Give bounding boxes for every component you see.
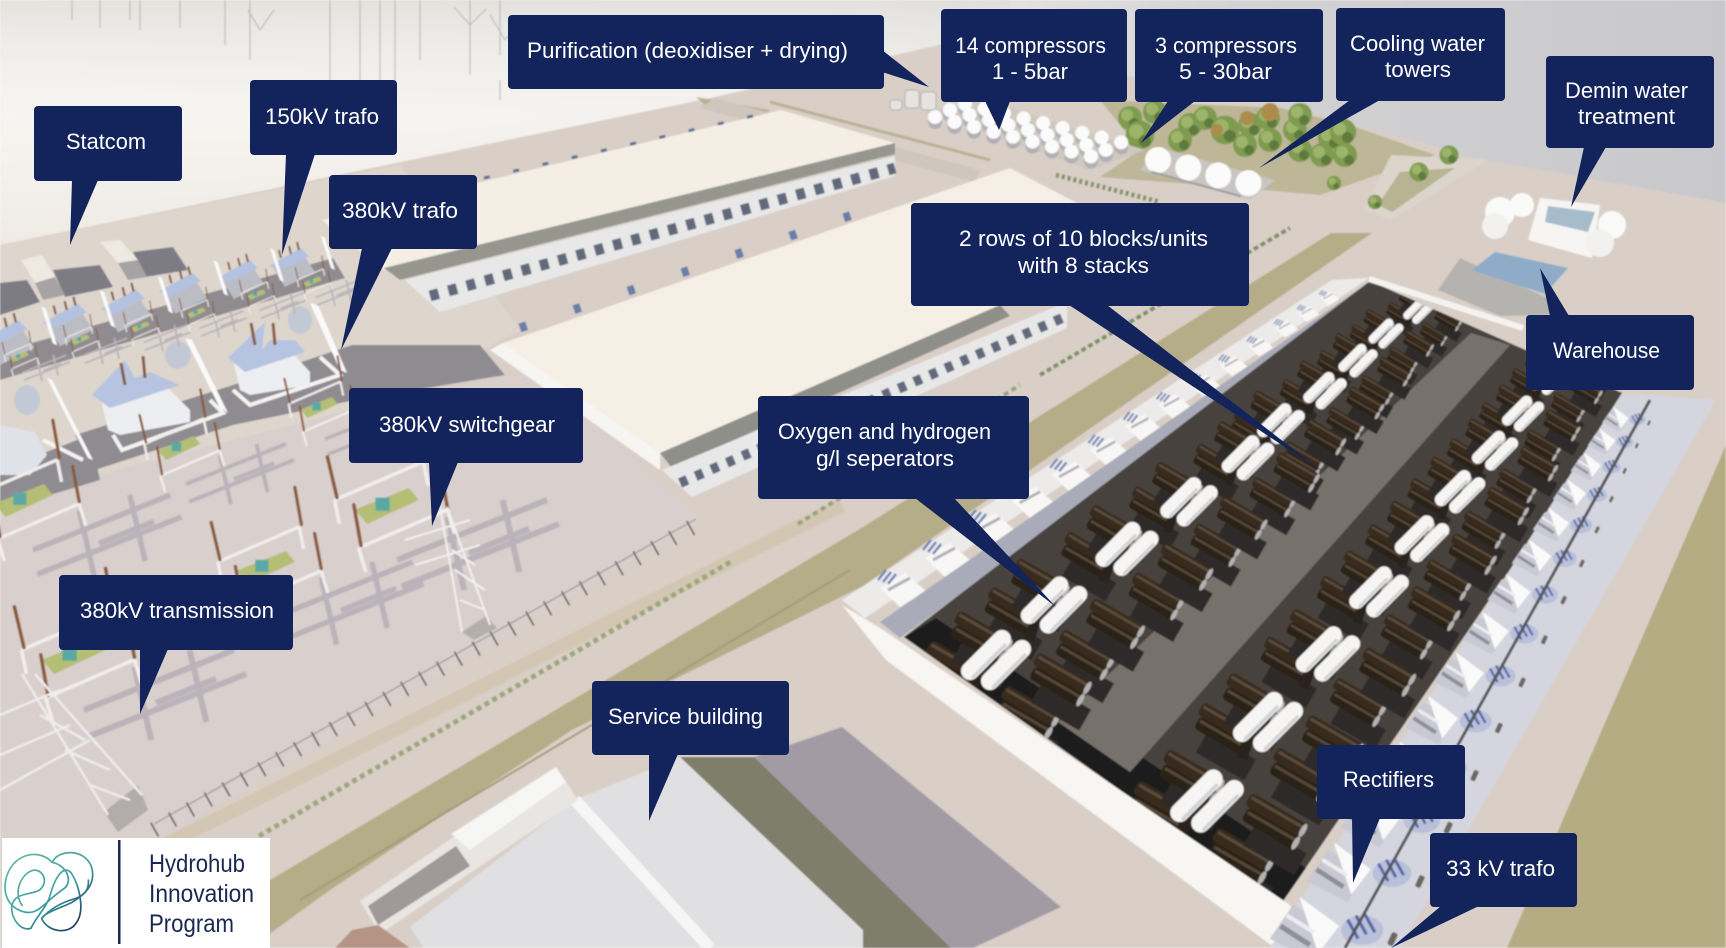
- statcom units: [0, 240, 188, 315]
- 380 kV transformer (right): [228, 303, 347, 405]
- switchgear bays with shadows: [0, 256, 559, 740]
- logo wordmark: Hydrohub: [149, 850, 245, 878]
- logo wordmark: [149, 850, 254, 938]
- callout: 14 compressors: 1 - 5bar: [992, 59, 1068, 84]
- callout: Demin water treatment: Demin water: [1565, 78, 1688, 103]
- callout: 150kV trafo: [250, 80, 397, 255]
- logo wordmark: Program: [149, 910, 234, 938]
- substation shadows: [0, 258, 505, 510]
- compressors: 14 units and 3 units: [926, 100, 1145, 170]
- olive diagonal strip: [250, 233, 1372, 948]
- callout: 2 rows of 10 blocks/units with 8 stacks: [911, 203, 1320, 470]
- ground: light zone around statcom and transformers: [0, 165, 520, 510]
- callout: 380kV transmission: 380kV transmission: [80, 598, 274, 623]
- callout: 14 compressors: 14 compressors: [955, 33, 1106, 58]
- callout: Service building: Service building: [608, 704, 763, 729]
- callout: Rectifiers: Rectifiers: [1343, 767, 1434, 792]
- ground: substation field: [0, 370, 700, 850]
- callout: 2 rows of 10 blocks/units with 8 stacks: 2 rows of 10 blocks/units: [959, 226, 1208, 251]
- callout: Purification: [508, 15, 929, 89]
- callout: Cooling water towers: [1259, 8, 1505, 168]
- lattice tower: lower left: [0, 674, 148, 832]
- front white wall of hall: [842, 605, 1312, 948]
- 380 kV transformer (centre): [92, 338, 228, 450]
- wind turbines on the water: [72, 0, 523, 125]
- callout: Warehouse: Warehouse: [1553, 338, 1660, 363]
- callout: 150kV trafo: 150kV trafo: [265, 104, 379, 129]
- purification tanks: [890, 90, 936, 110]
- callout: 380kV trafo: 380kV trafo: [342, 198, 458, 223]
- callout: 33 kV trafo: [1391, 833, 1577, 948]
- callout: 33 kV trafo: 33 kV trafo: [1446, 856, 1555, 881]
- hall 1: cooling building roof: [322, 110, 895, 328]
- planted strip near entrance: [1364, 155, 1488, 220]
- logo mark: [5, 853, 93, 931]
- callout: 380kV switchgear: 380kV switchgear: [379, 412, 555, 437]
- callout: Demin water treatment: [1546, 56, 1714, 207]
- callout: Oxygen and hydrogen g/l seperators: g/l seperators: [816, 446, 954, 471]
- lattice tower: 380 kV line: [405, 507, 497, 640]
- callout: Purification: Purification (deoxidiser + drying): [527, 38, 848, 63]
- callout: Statcom: Statcom: [66, 129, 146, 154]
- callout: 380kV switchgear: [349, 388, 583, 526]
- callout: Demin water treatment: treatment: [1578, 104, 1675, 129]
- callout: Service building: [592, 681, 789, 821]
- callout: Oxygen and hydrogen g/l seperators: Oxygen and hydrogen: [778, 419, 991, 444]
- callout: 380kV transmission: [59, 575, 293, 714]
- right band: rectifiers and 33 kV transformers: [1270, 393, 1716, 948]
- background: water and sky: [0, 0, 1726, 300]
- callout: Statcom: [34, 106, 182, 245]
- 380 kV transformer (left): [0, 378, 93, 475]
- service building: [335, 757, 863, 948]
- hall 2: cooling building roof: [490, 168, 1100, 497]
- electrolyser blocks: 2 rows of stacks and separators: [908, 288, 1629, 910]
- logo divider: [118, 840, 120, 944]
- logo: Hydrohub Innovation Program: [2, 838, 270, 948]
- demin water treatment plant: [1482, 193, 1626, 258]
- service building shadow: [680, 727, 1061, 948]
- road at top: [696, 97, 1160, 202]
- trees: [1118, 100, 1459, 209]
- callout: Cooling water towers: Cooling water: [1350, 31, 1485, 56]
- olive ground at bottom right: [1507, 445, 1726, 948]
- callout: 2 rows of 10 blocks/units with 8 stacks: with 8 stacks: [1017, 253, 1149, 278]
- upper-left wall band of electrolyser hall: [842, 278, 1376, 638]
- olive ground behind trees: [1100, 100, 1435, 195]
- callout: 3 compressors: 3 compressors: [1155, 33, 1297, 58]
- callout: 3 compressors: 5 - 30bar: [1179, 59, 1272, 84]
- callout: Oxygen and hydrogen g/l seperators: [758, 396, 1056, 607]
- callout: Warehouse: [1526, 268, 1694, 390]
- callout: 3 compressors: [1135, 9, 1323, 143]
- callout: 380kV trafo: [329, 175, 477, 350]
- 150 kV transformers row: [0, 236, 335, 365]
- electrolyser hall floor with walkway: [904, 279, 1629, 904]
- cooling water towers: [1140, 148, 1275, 200]
- callout: 14 compressors: [941, 9, 1127, 130]
- gravel road and fence: [154, 228, 1290, 900]
- logo wordmark: Innovation: [149, 880, 254, 908]
- callout: Cooling water towers: towers: [1385, 57, 1451, 82]
- warehouse: [1438, 252, 1568, 316]
- callout: Rectifiers: [1317, 745, 1465, 883]
